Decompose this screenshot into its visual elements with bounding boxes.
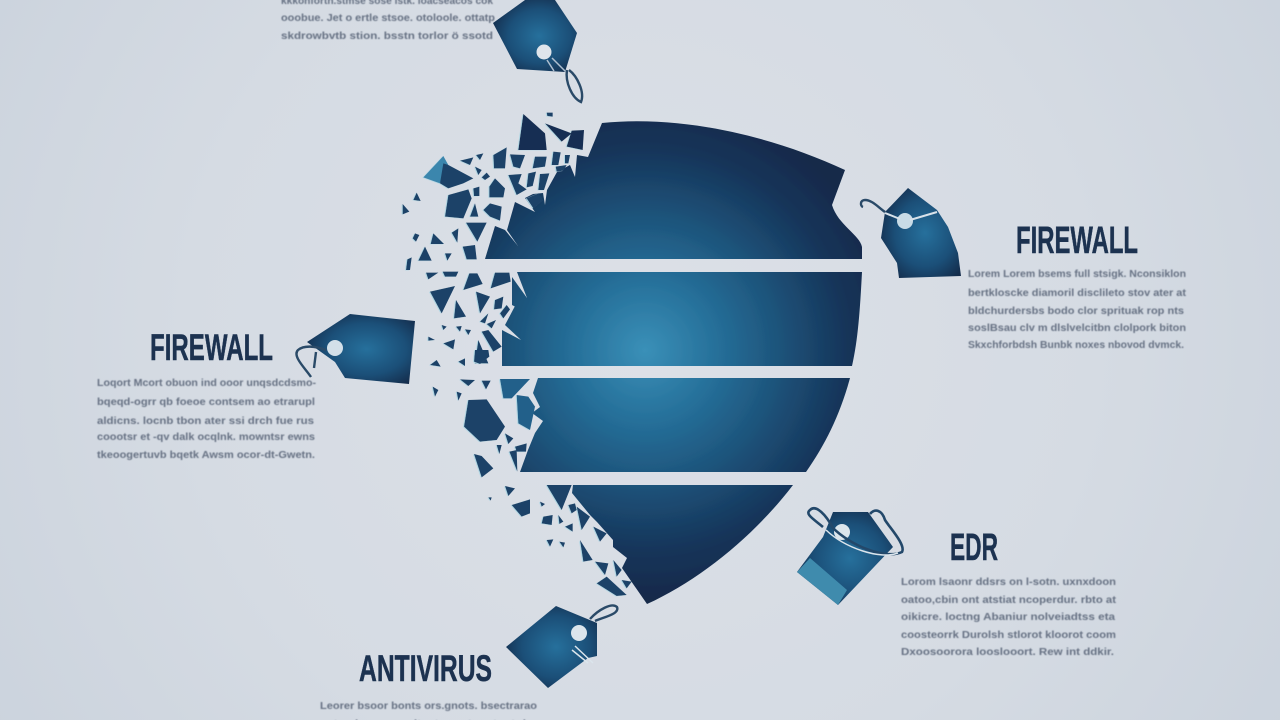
text block: left firewall: Loqort Mcort obuon ind ooor unqsdcdsmo- xyxy=(97,377,317,389)
text block: left firewall: tkeoogertuvb bqetk Awsm ocor-dt-Gwetn. xyxy=(97,449,315,461)
text block: top: ooobue. Jet o ertle stsoe. otoloole. ottatp xyxy=(281,12,495,24)
text block: right firewall: bldchurdersbs bodo clor sprituak rop nts xyxy=(968,305,1184,317)
text block: antivirus: Leorer bsoor bonts ors.gnots. bsectrarao xyxy=(320,700,537,712)
text block: EDR xyxy=(901,576,1117,658)
text block: left firewall: aldicns. locnb tbon ater ssi drch fue rus xyxy=(97,415,314,427)
text block: right firewall: soslBsau clv m dlslvelcitbn clolpork biton xyxy=(968,322,1186,334)
shattered fragments: lower shield xyxy=(430,350,632,596)
text block: EDR: oikicre. loctng Abaniur nolveiadtss eta xyxy=(901,611,1115,623)
heading: left firewall: FIREWALL xyxy=(150,327,273,368)
icon: right tag xyxy=(861,188,961,278)
shield: four horizontal bands xyxy=(485,121,862,604)
text block: top xyxy=(281,0,495,42)
text block: right firewall: bertkloscke diamoril disclileto stov ater at xyxy=(968,287,1187,299)
text block: EDR: oatoo,cbin ont atstiat ncoperdur. rbto at xyxy=(901,594,1117,606)
icon: top tag xyxy=(493,0,582,102)
text block: top: skdrowbvtb stion. bsstn torlor ö ssotd xyxy=(281,30,493,42)
icon: left tag xyxy=(296,314,415,384)
text block: right firewall: Lorem Lorem bsems full stsigk. Nconsiklon xyxy=(968,268,1186,280)
text block: EDR: Lorom lsaonr ddsrs on l-sotn. uxnxdoon xyxy=(901,576,1116,588)
text block: EDR: Dxoosoorora looslooort. Rew int ddkir. xyxy=(901,646,1114,658)
text block: left firewall: coootsr et -qv dalk ocqlnk. mowntsr ewns xyxy=(97,431,315,443)
text block: right firewall xyxy=(968,268,1187,351)
heading: right firewall: FIREWALL xyxy=(1016,220,1138,262)
heading: antivirus: ANTIVIRUS xyxy=(359,648,492,689)
text block: antivirus xyxy=(320,700,537,720)
text block: left firewall xyxy=(97,377,317,461)
icon: antivirus tag xyxy=(506,605,617,688)
heading: EDR: EDR xyxy=(950,527,998,569)
text block: EDR: coosteorrk Durolsh stlorot kloorot coom xyxy=(901,629,1116,641)
text block: left firewall: bqeqd-ogrr qb foeoe contsem ao etrarupl xyxy=(97,396,315,408)
text block: right firewall: Skxchforbdsh Bunbk noxes nbovod dvmck. xyxy=(968,339,1184,351)
shattered fragments: upper shield xyxy=(403,113,584,363)
icon: EDR tag xyxy=(797,508,903,605)
